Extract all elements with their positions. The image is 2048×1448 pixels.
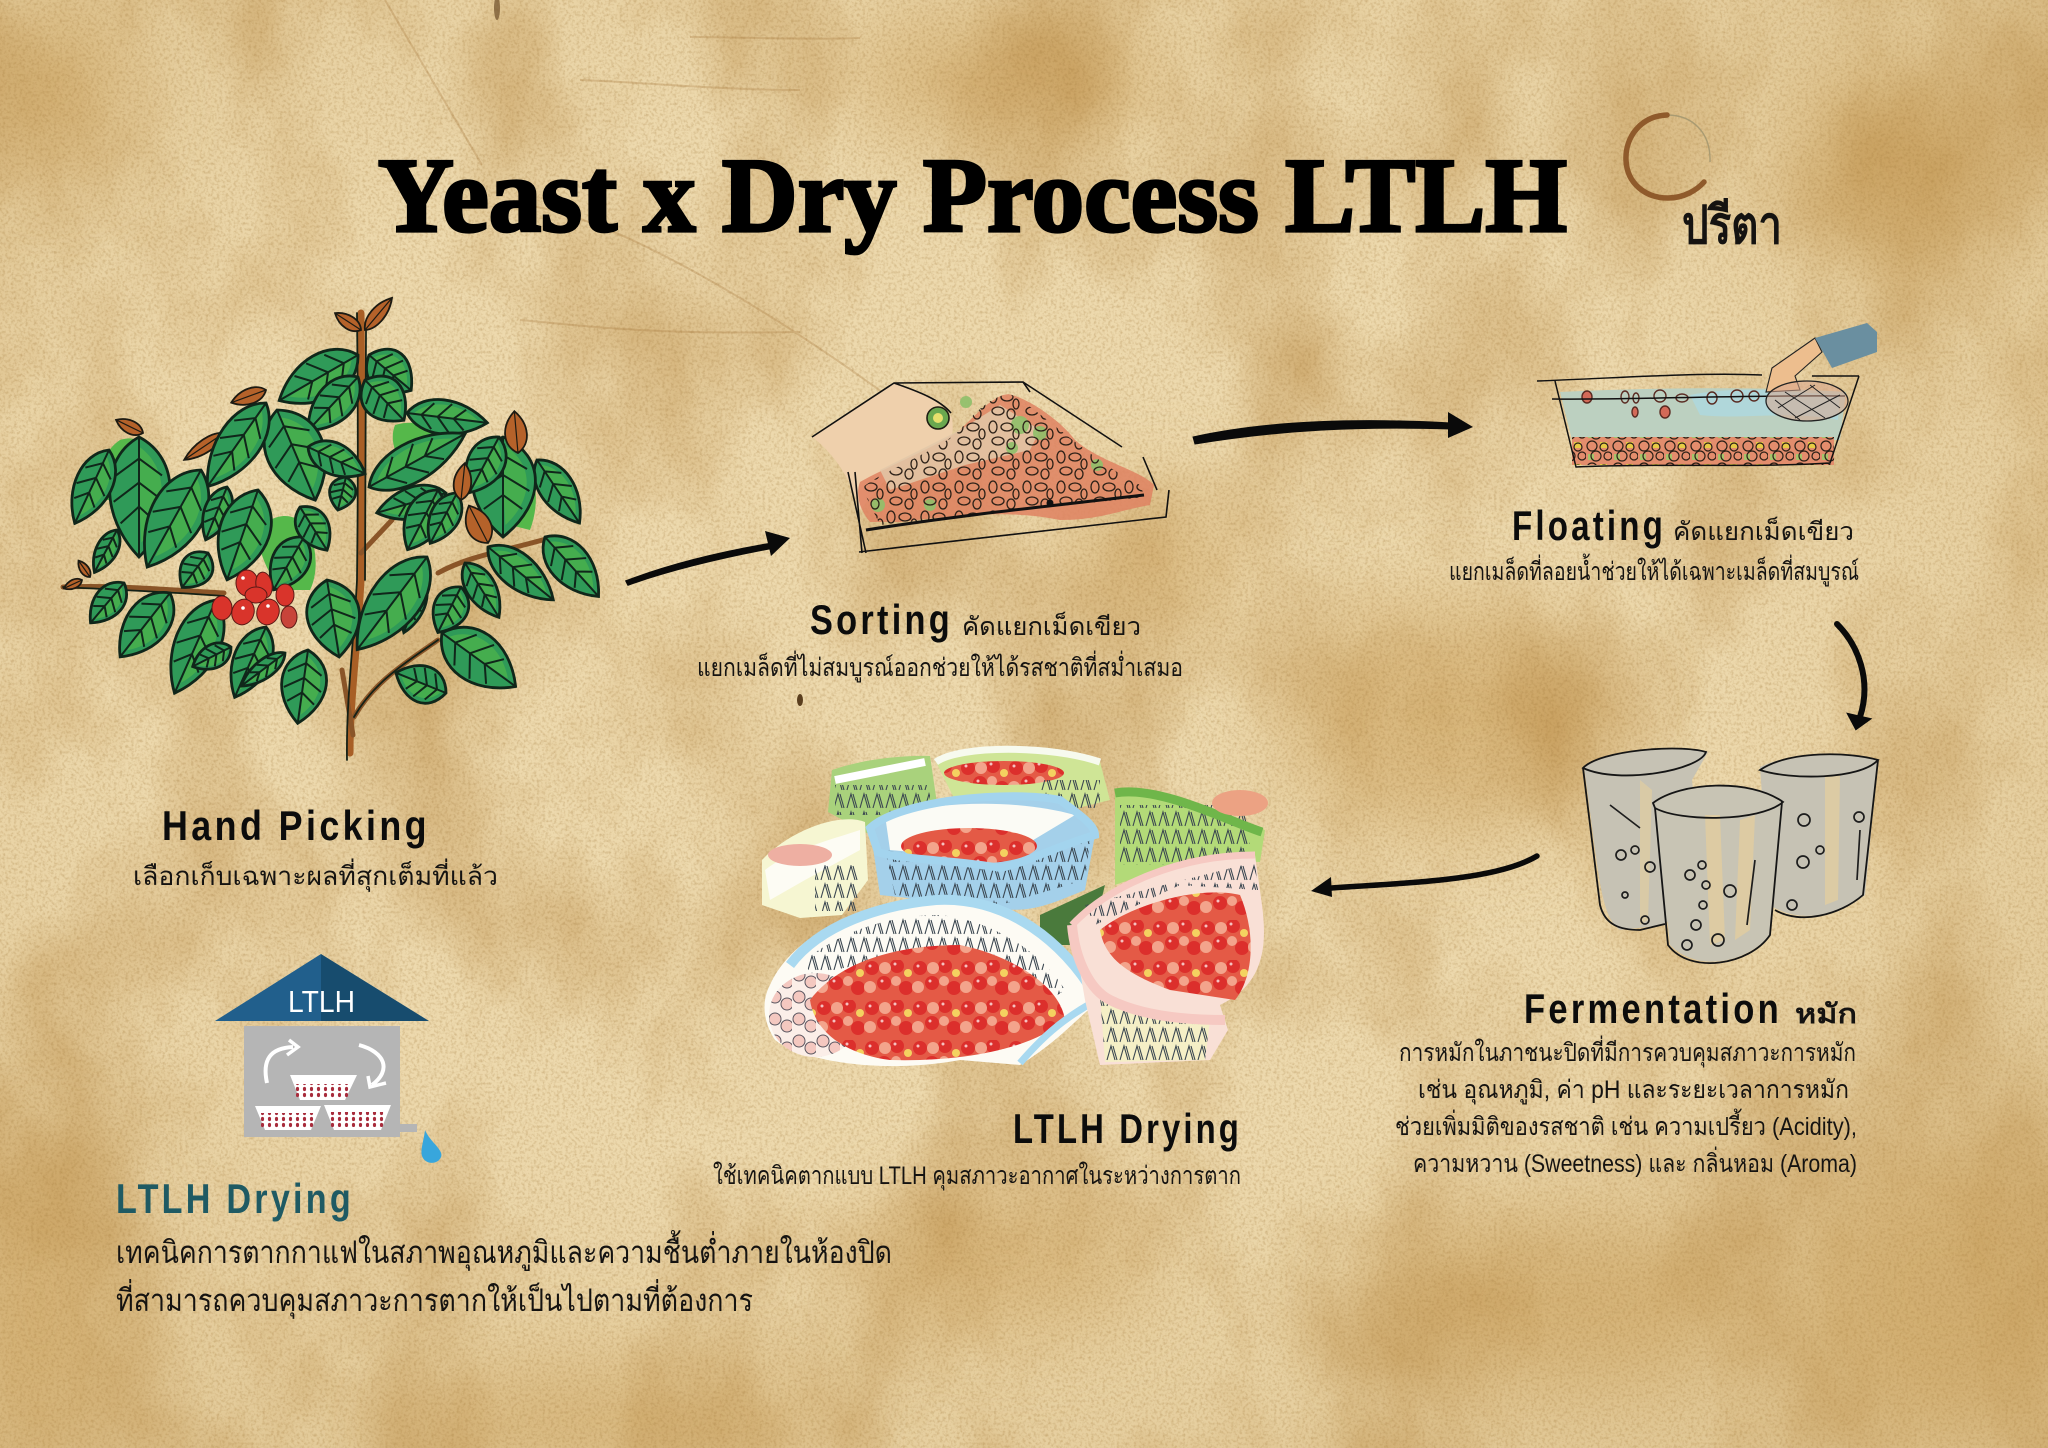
bubbles	[1610, 805, 1864, 950]
illustration: drying baskets	[762, 749, 1268, 1066]
dark gap	[1040, 885, 1105, 945]
left bucket	[1584, 749, 1708, 930]
left pale basket	[762, 819, 868, 918]
logo: coffee ring and script	[1626, 115, 1782, 255]
autumn leaves on the right	[452, 410, 528, 549]
trays	[255, 1075, 391, 1130]
roof	[215, 954, 429, 1021]
label: hand picking: เลือกเก็บเฉพาะผลที่สุกเต็มที่แล้ว	[133, 858, 498, 892]
right bucket	[1760, 755, 1878, 916]
beans	[862, 395, 1145, 525]
red coffee cherries	[212, 570, 297, 628]
stems and branches	[63, 313, 553, 760]
text block: LTLH drying explanation: LTLH Drying	[116, 1175, 354, 1222]
text block: LTLH drying explanation	[116, 1175, 892, 1320]
label: sorting: Sorting	[810, 596, 953, 643]
water spout	[400, 1124, 417, 1132]
arrow: fermentation to drying	[1311, 856, 1537, 897]
text block: LTLH drying explanation: ที่สามารถควบคุมสภาวะการตากให้เป็นไปตามที่ต้องการ	[116, 1279, 753, 1320]
label: floating	[1449, 502, 1859, 587]
water	[1560, 388, 1846, 440]
bottom-left basket	[765, 897, 1100, 1066]
arm	[1766, 338, 1822, 392]
label: LTLH drying under the baskets: LTLH Drying	[1013, 1105, 1242, 1152]
right green basket	[1115, 788, 1265, 885]
label: fermentation: ความหวาน (Sweetness) และ กลิ่นหอม (Aroma)	[1413, 1146, 1857, 1178]
label: LTLH drying under the baskets	[713, 1105, 1242, 1191]
arrow: sorting to floating	[1193, 412, 1473, 444]
label: sorting: คัดแยกเม็ดเขียว	[962, 611, 1141, 641]
roof: LTLH	[288, 984, 355, 1019]
label: fermentation: หมัก	[1795, 999, 1857, 1029]
leaves	[59, 336, 614, 726]
arrow: picking to sorting	[626, 531, 790, 585]
label: sorting: แยกเมล็ดที่ไม่สมบูรณ์ออกช่วยให้ได้รสชาติที่สม่ำเสมอ	[697, 650, 1183, 683]
illustration: sorting tray	[812, 382, 1169, 553]
hand	[812, 383, 953, 510]
illustration: coffee plant	[59, 293, 614, 760]
label: fermentation: ช่วยเพิ่มมิติของรสชาติ เช่น ความเปรี้ยว (Acidity),	[1395, 1108, 1857, 1141]
label: sorting	[697, 596, 1183, 683]
tub outline	[1537, 374, 1859, 467]
label: LTLH drying under the baskets: ใช้เทคนิคตากแบบ LTLH คุมสภาวะอากาศในระหว่างการตาก	[713, 1161, 1241, 1191]
label: fermentation: การหมักในภาชนะปิดที่มีการควบคุมสภาวะการหมัก	[1399, 1035, 1856, 1068]
icon: LTLH drying house	[215, 954, 441, 1163]
circulation arrows	[266, 1040, 386, 1087]
label: fermentation	[1395, 985, 1857, 1178]
label: floating: แยกเมล็ดที่ลอยน้ำช่วยให้ได้เฉพาะเมล็ดที่สมบูรณ์	[1449, 553, 1859, 587]
sunken beans	[1572, 437, 1834, 465]
text block: LTLH drying explanation: เทคนิคการตากกาแฟในสภาพอุณหภูมิและความชื้นต่ำภายในห้องปิด	[116, 1230, 892, 1272]
title: Yeast x Dry Process LTLH	[378, 137, 1567, 254]
centre bucket	[1655, 786, 1783, 962]
logo wordmark: ปรีตา	[1682, 197, 1782, 255]
label: fermentation: Fermentation	[1524, 985, 1782, 1032]
top-centre basket	[936, 749, 1110, 815]
green wash behind the leaves	[99, 423, 536, 590]
floating beans	[1582, 390, 1759, 418]
fruit wash	[858, 394, 1154, 522]
label: hand picking	[133, 802, 498, 892]
illustration: floating tub	[1537, 323, 1877, 467]
label: floating: คัดแยกเม็ดเขียว	[1673, 516, 1854, 546]
label: floating: Floating	[1512, 502, 1666, 549]
illustration: fermentation buckets	[1583, 749, 1878, 963]
label: fermentation: เช่น อุณหภูมิ, ค่า pH และระยะเวลาการหมัก	[1418, 1076, 1849, 1105]
room	[244, 1026, 400, 1137]
top-left green basket	[828, 756, 938, 840]
water drop	[421, 1130, 441, 1163]
centre blue basket	[870, 796, 1095, 910]
brown young leaves	[62, 293, 397, 593]
arrow: floating to fermentation	[1837, 624, 1870, 729]
sieve	[1766, 381, 1848, 421]
sleeve	[1815, 323, 1877, 368]
tray outlines	[812, 382, 1157, 490]
label: hand picking: Hand Picking	[162, 802, 430, 849]
right pink basket	[1072, 855, 1264, 1065]
